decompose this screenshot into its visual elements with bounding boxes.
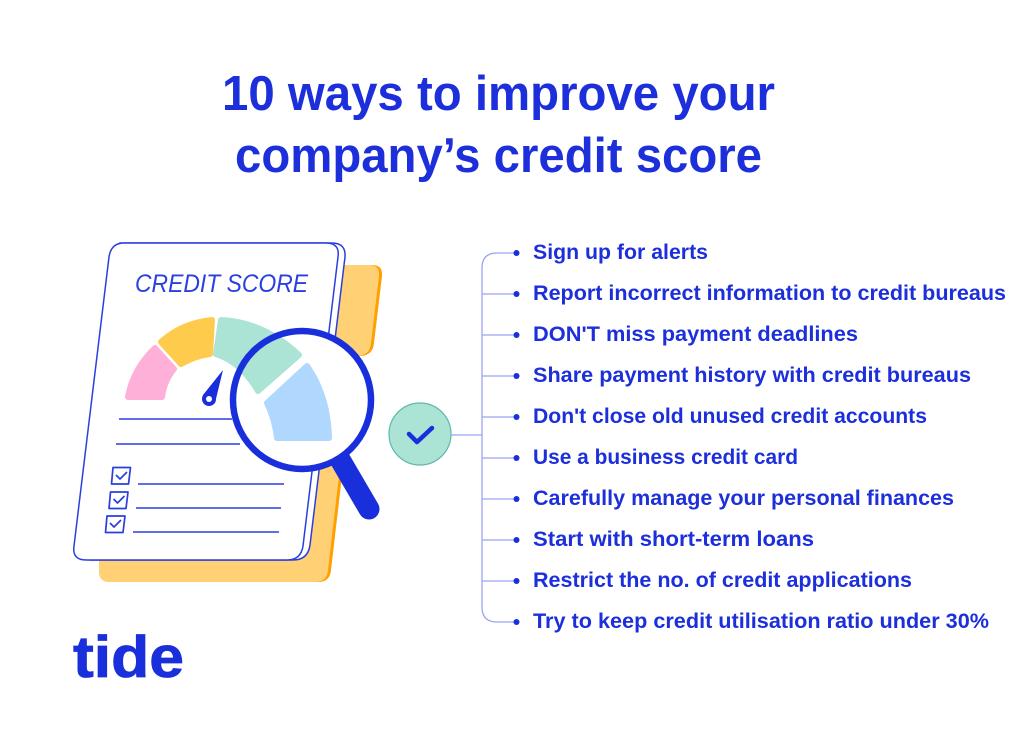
list of 10 ways: Carefully manage your personal finances — [533, 486, 954, 510]
list of 10 ways: Use a business credit card — [533, 445, 798, 469]
list of 10 ways: Share payment history with credit bureaus — [533, 363, 971, 387]
document lines — [116, 419, 284, 532]
magnifier — [216, 320, 371, 509]
list of 10 ways: Don't close old unused credit accounts — [533, 404, 927, 428]
list bullets — [514, 250, 520, 625]
lens ring — [233, 331, 371, 469]
list of 10 ways: DON'T miss payment deadlines — [533, 322, 858, 346]
title: 10 ways to improve your — [222, 67, 775, 121]
magnifier handle — [338, 456, 369, 509]
back sheet — [90, 243, 345, 560]
list of 10 ways — [533, 240, 1006, 633]
title: company’s credit score — [235, 129, 762, 183]
folder behind document — [99, 265, 382, 582]
title — [222, 67, 775, 183]
gauge: pink segment — [128, 348, 174, 397]
illustration: credit score document under magnifier — [74, 243, 382, 582]
list of 10 ways: Restrict the no. of credit applications — [533, 568, 912, 592]
logo: tide — [73, 625, 184, 690]
gauge: yellow segment — [161, 320, 212, 364]
checkboxes — [106, 468, 130, 532]
list of 10 ways: Try to keep credit utilisation ratio under 30% — [533, 609, 989, 633]
list of 10 ways: Start with short-term loans — [533, 527, 814, 551]
gauge needle — [202, 370, 223, 406]
check badge — [389, 403, 451, 465]
connector tree — [451, 253, 516, 622]
gauge: green segment — [216, 320, 299, 391]
lens glass — [233, 331, 371, 469]
list of 10 ways: Sign up for alerts — [533, 240, 708, 264]
gauge: blue segment — [267, 366, 329, 438]
list of 10 ways: Report incorrect information to credit bureaus — [533, 281, 1006, 305]
sheet heading: CREDIT SCORE — [135, 270, 308, 298]
front sheet — [74, 243, 338, 560]
